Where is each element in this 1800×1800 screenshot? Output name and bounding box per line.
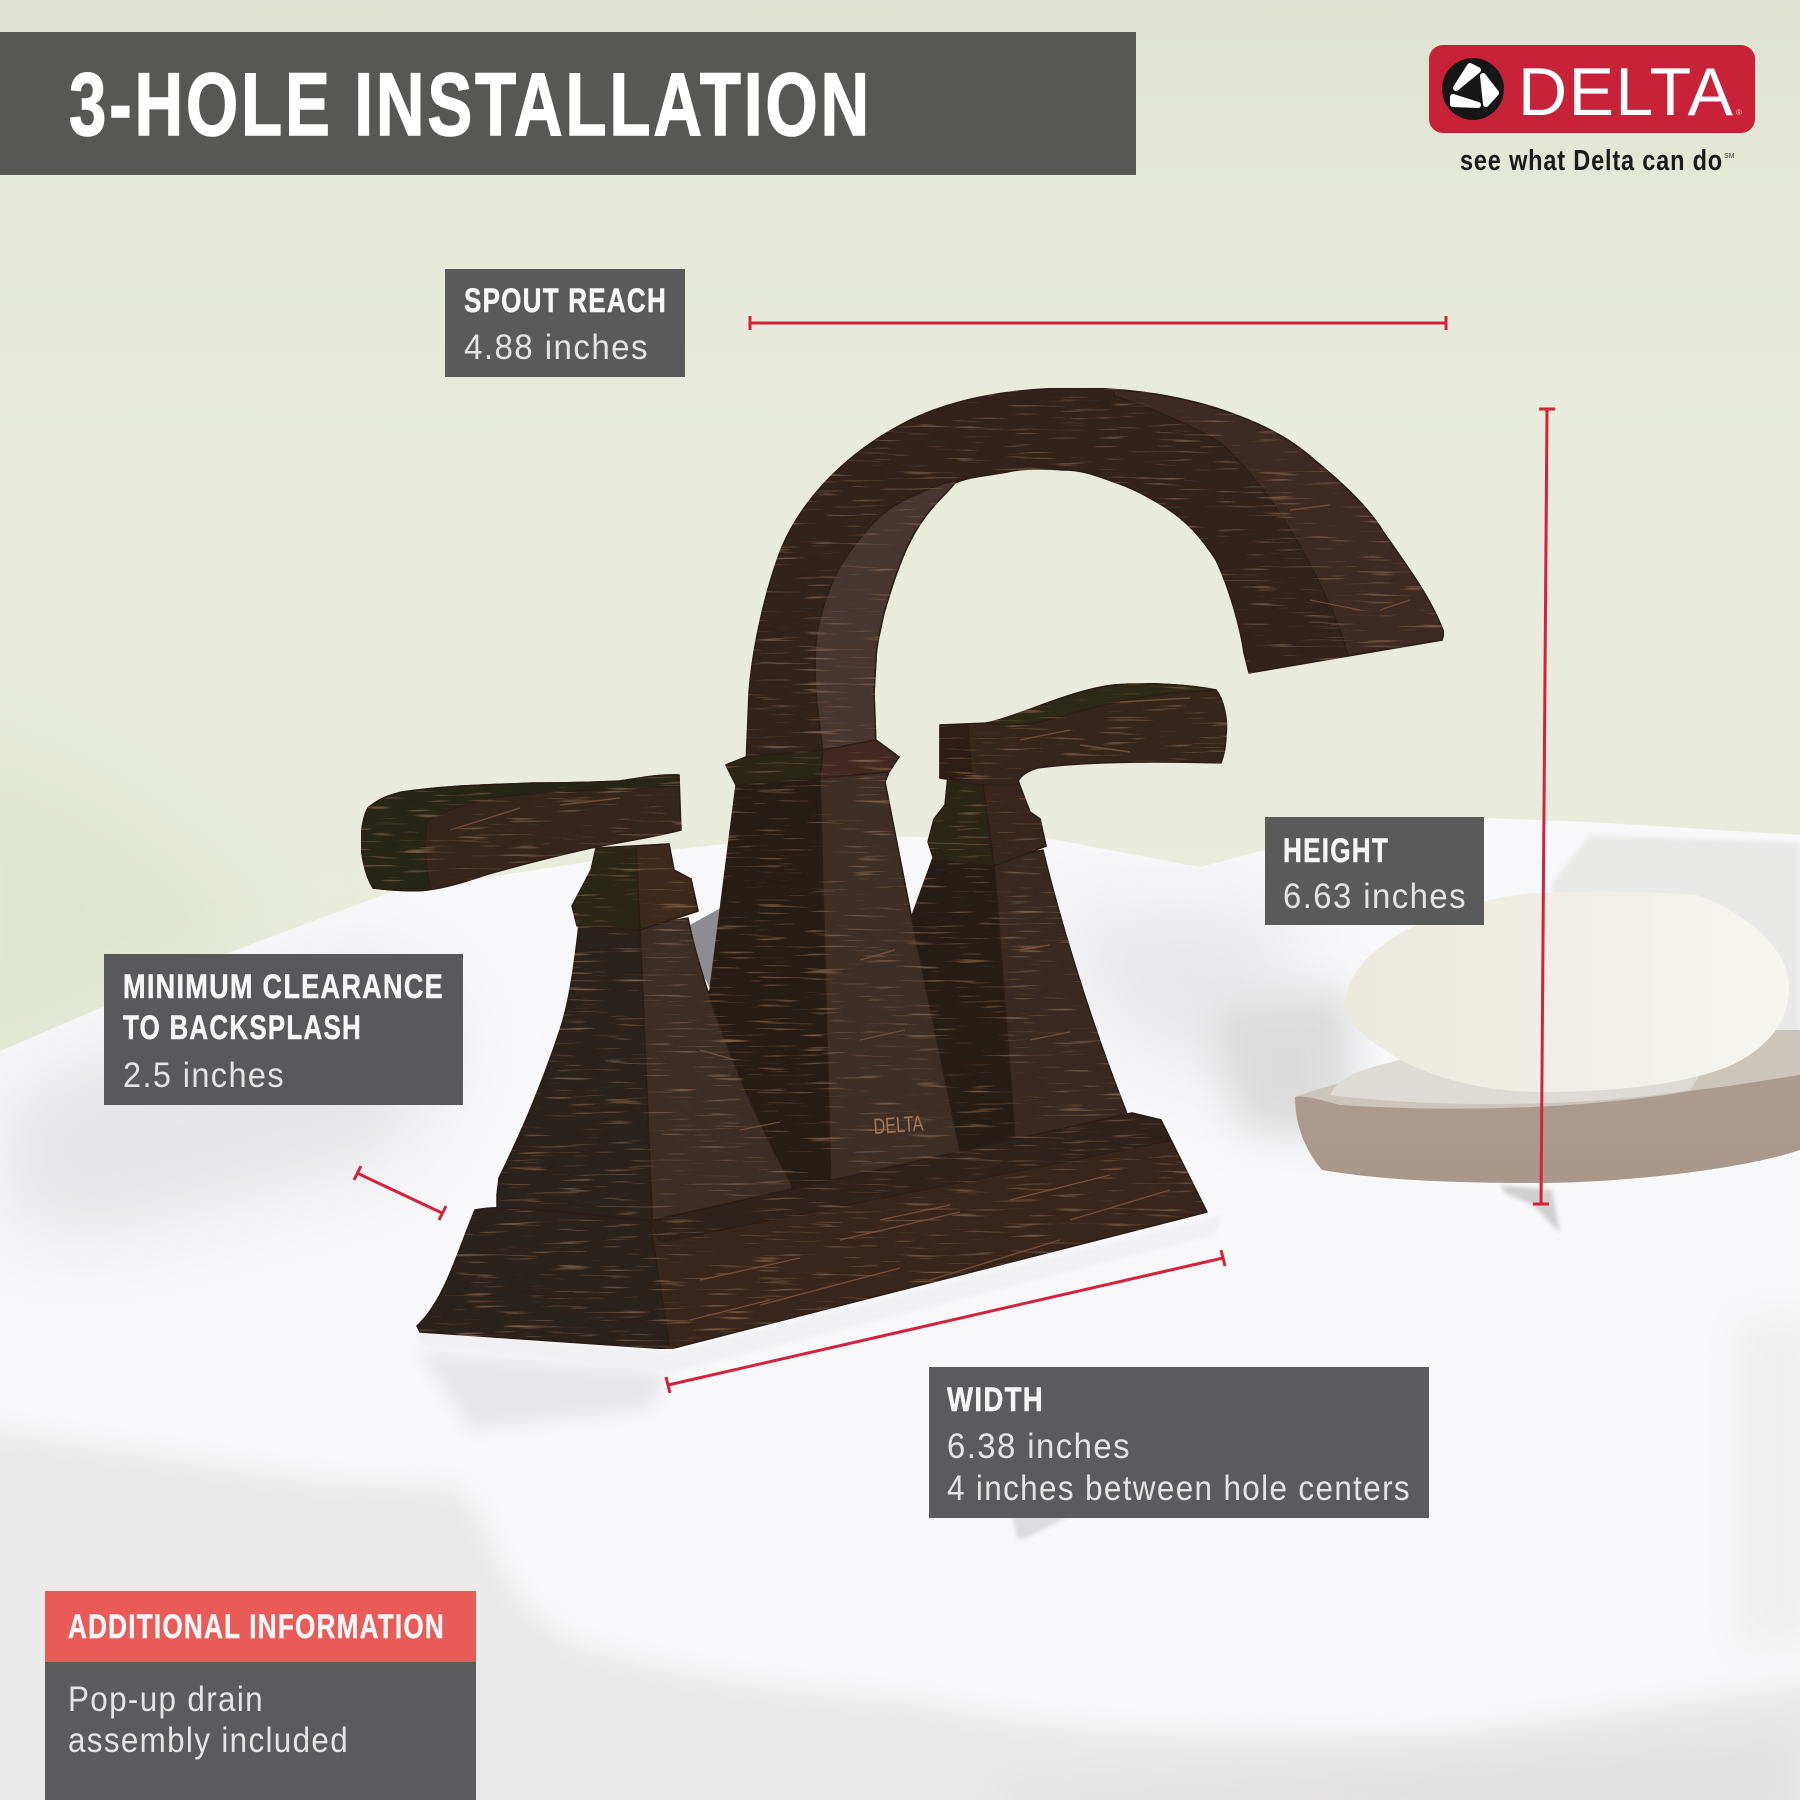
right handle body: [905, 850, 1130, 1165]
additional information heading: ADDITIONAL INFORMATION: [68, 1608, 445, 1646]
logo wordmark: DELTA: [1518, 54, 1734, 130]
additional information text: [68, 1680, 349, 1760]
minimum clearance callout: [104, 954, 463, 1105]
height callout: 6.63 inches: [1283, 877, 1467, 916]
left handle stem: [572, 844, 698, 930]
logo tagline: see what Delta can do: [1460, 145, 1723, 177]
width callout: 6.38 inches: [947, 1427, 1131, 1466]
minimum clearance callout: TO BACKSPLASH: [123, 1009, 362, 1047]
spout reach callout: 4.88 inches: [464, 328, 649, 367]
additional information heading: [45, 1591, 476, 1662]
sink shading: [0, 835, 1800, 1800]
copper brush streaks: [450, 505, 1410, 1320]
faucet engraved logo: DELTA: [873, 1111, 924, 1139]
title text: 3-HOLE INSTALLATION: [69, 54, 872, 154]
left lever: [361, 775, 681, 891]
width callout: 4 inches between hole centers: [947, 1469, 1411, 1508]
spout reach callout: SPOUT REACH: [464, 282, 667, 320]
spout side face: [1114, 390, 1444, 655]
spout underside: [815, 472, 1007, 752]
width callout: [929, 1367, 1429, 1518]
minimum clearance callout: MINIMUM CLEARANCE: [123, 968, 444, 1006]
faucet backing: [660, 900, 1126, 1240]
height callout: HEIGHT: [1283, 832, 1389, 870]
Delta logo: [1429, 45, 1755, 177]
additional information text: Pop-up drain: [68, 1680, 264, 1719]
right lever: [940, 684, 1227, 785]
width callout: WIDTH: [947, 1381, 1044, 1419]
left handle body: [497, 918, 795, 1235]
faucet: [361, 388, 1444, 1349]
spout reach callout: [445, 269, 685, 377]
spout reach dimension line: [750, 316, 1446, 330]
title bar: [0, 32, 1136, 175]
center body: [690, 740, 962, 1210]
additional information text: assembly included: [68, 1721, 349, 1760]
right handle stem: [928, 775, 1046, 866]
minimum clearance callout: 2.5 inches: [123, 1056, 285, 1095]
faucet base: [417, 1113, 1207, 1349]
height dimension line: [1533, 409, 1555, 1204]
spout: [746, 388, 1444, 765]
Delta logo: ®: [1736, 108, 1742, 117]
width dimension line: [666, 1250, 1225, 1393]
soap bar: [1345, 892, 1789, 1092]
drain shadow: [1012, 1516, 1070, 1540]
white sink: [0, 818, 1800, 1800]
soap dish: [1295, 1030, 1800, 1183]
logo emblem: [1442, 58, 1504, 120]
additional information panel: [45, 1591, 476, 1800]
height callout: [1265, 817, 1484, 925]
Delta logo: SM: [1724, 153, 1735, 160]
clearance dimension line: [354, 1166, 446, 1220]
